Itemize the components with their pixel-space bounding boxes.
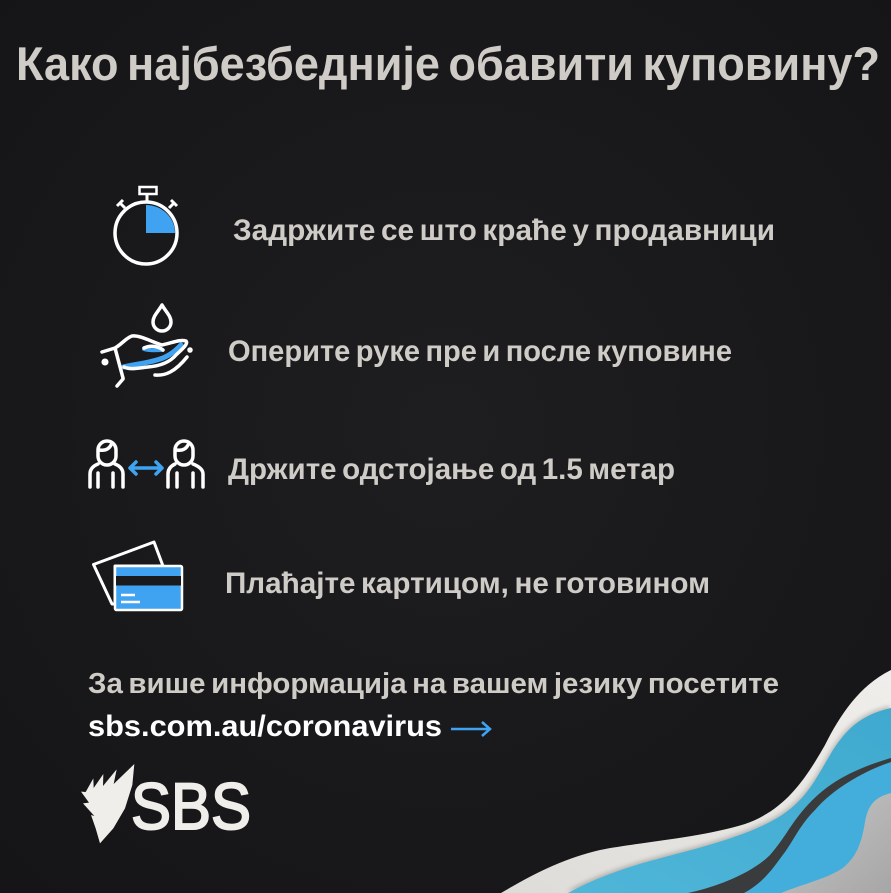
icon: washing hands <box>102 305 191 386</box>
logo: SBS <box>81 764 251 843</box>
icon: two people with distance arrow <box>90 441 203 487</box>
icon: distance arrow <box>130 462 162 474</box>
logo: wordmark: SBS <box>131 769 251 843</box>
icon: left person <box>90 441 123 487</box>
decorative waves <box>501 670 891 893</box>
icon: stopwatch <box>115 187 177 264</box>
text: keep distance: Држите одстојање од 1.5 метар <box>228 453 675 486</box>
text: stay short: Задржите се што краће у продавници <box>233 214 775 247</box>
wave: light blue <box>568 708 891 893</box>
icon: payment cards <box>94 542 182 610</box>
wave: dark <box>688 758 891 893</box>
arrow: link <box>451 722 490 736</box>
text: more information: За више информација на вашем језику посетите <box>88 668 779 700</box>
wave: blue <box>744 762 891 893</box>
text: wash hands: Оперите руке пре и после куповине <box>228 335 732 368</box>
wave: white <box>501 670 891 893</box>
title: Како најбезбедније обавити куповину? <box>16 37 880 90</box>
icon: right person <box>168 441 203 487</box>
wave: gray <box>781 793 891 893</box>
link: website: sbs.com.au/coronavirus <box>88 710 442 743</box>
text: pay by card: Плаћајте картицом, не готовином <box>225 567 710 600</box>
logo: mercury symbol <box>81 764 134 843</box>
